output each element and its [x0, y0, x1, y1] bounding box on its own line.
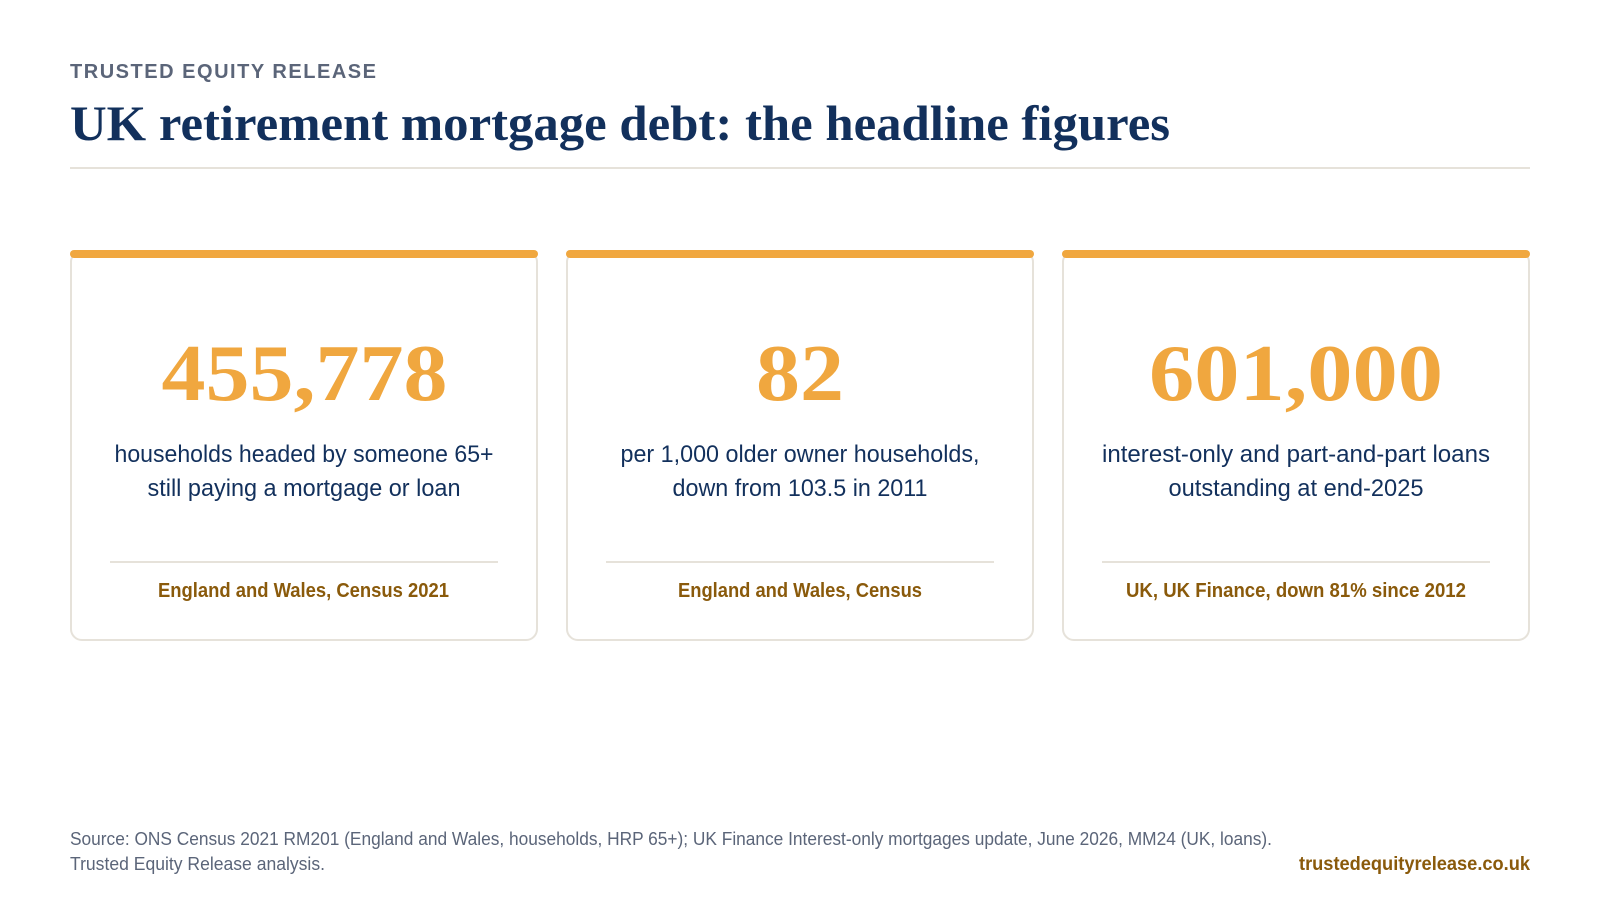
source text: Trusted Equity Release analysis. — [70, 853, 325, 874]
card accent bar — [566, 250, 1034, 258]
panel: rate per 1,000 — [566, 250, 1034, 640]
panel: households still paying — [70, 250, 538, 640]
description: households headed by someone 65+ — [114, 441, 494, 468]
title: UK retirement mortgage debt: the headline figures — [70, 95, 1170, 151]
website: trustedequityrelease.co.uk — [1299, 853, 1530, 875]
source note: England and Wales, Census 2021 — [158, 580, 449, 602]
header rule — [70, 167, 1530, 169]
source text — [70, 828, 1272, 874]
card frame — [567, 251, 1033, 640]
description: per 1,000 older owner households, — [620, 441, 980, 468]
card accent bar — [70, 250, 538, 258]
big number: 82 — [756, 328, 844, 418]
header — [70, 61, 1530, 169]
source note: UK, UK Finance, down 81% since 2012 — [1126, 580, 1466, 602]
big number: 455,778 — [162, 328, 448, 418]
panel: interest-only loans — [1062, 250, 1530, 640]
card frame — [71, 251, 537, 640]
big number: 601,000 — [1149, 328, 1443, 418]
source text: Source: ONS Census 2021 RM201 (England and Wales, households, HRP 65+); UK Finance Interest-only mortgages update, June 2026, MM24 (UK, loans). — [70, 828, 1272, 849]
panel: interest-only loans: outstanding at end-2025 — [1168, 475, 1424, 502]
eyebrow: TRUSTED EQUITY RELEASE — [70, 61, 376, 83]
panel: rate per 1,000: down from 103.5 in 2011 — [672, 475, 928, 502]
card accent bar — [1062, 250, 1530, 258]
panel: households still paying: still paying a mortgage or loan — [148, 475, 460, 502]
card frame — [1063, 251, 1529, 640]
source note: England and Wales, Census — [678, 580, 922, 602]
description: interest-only and part-and-part loans — [1102, 441, 1490, 468]
